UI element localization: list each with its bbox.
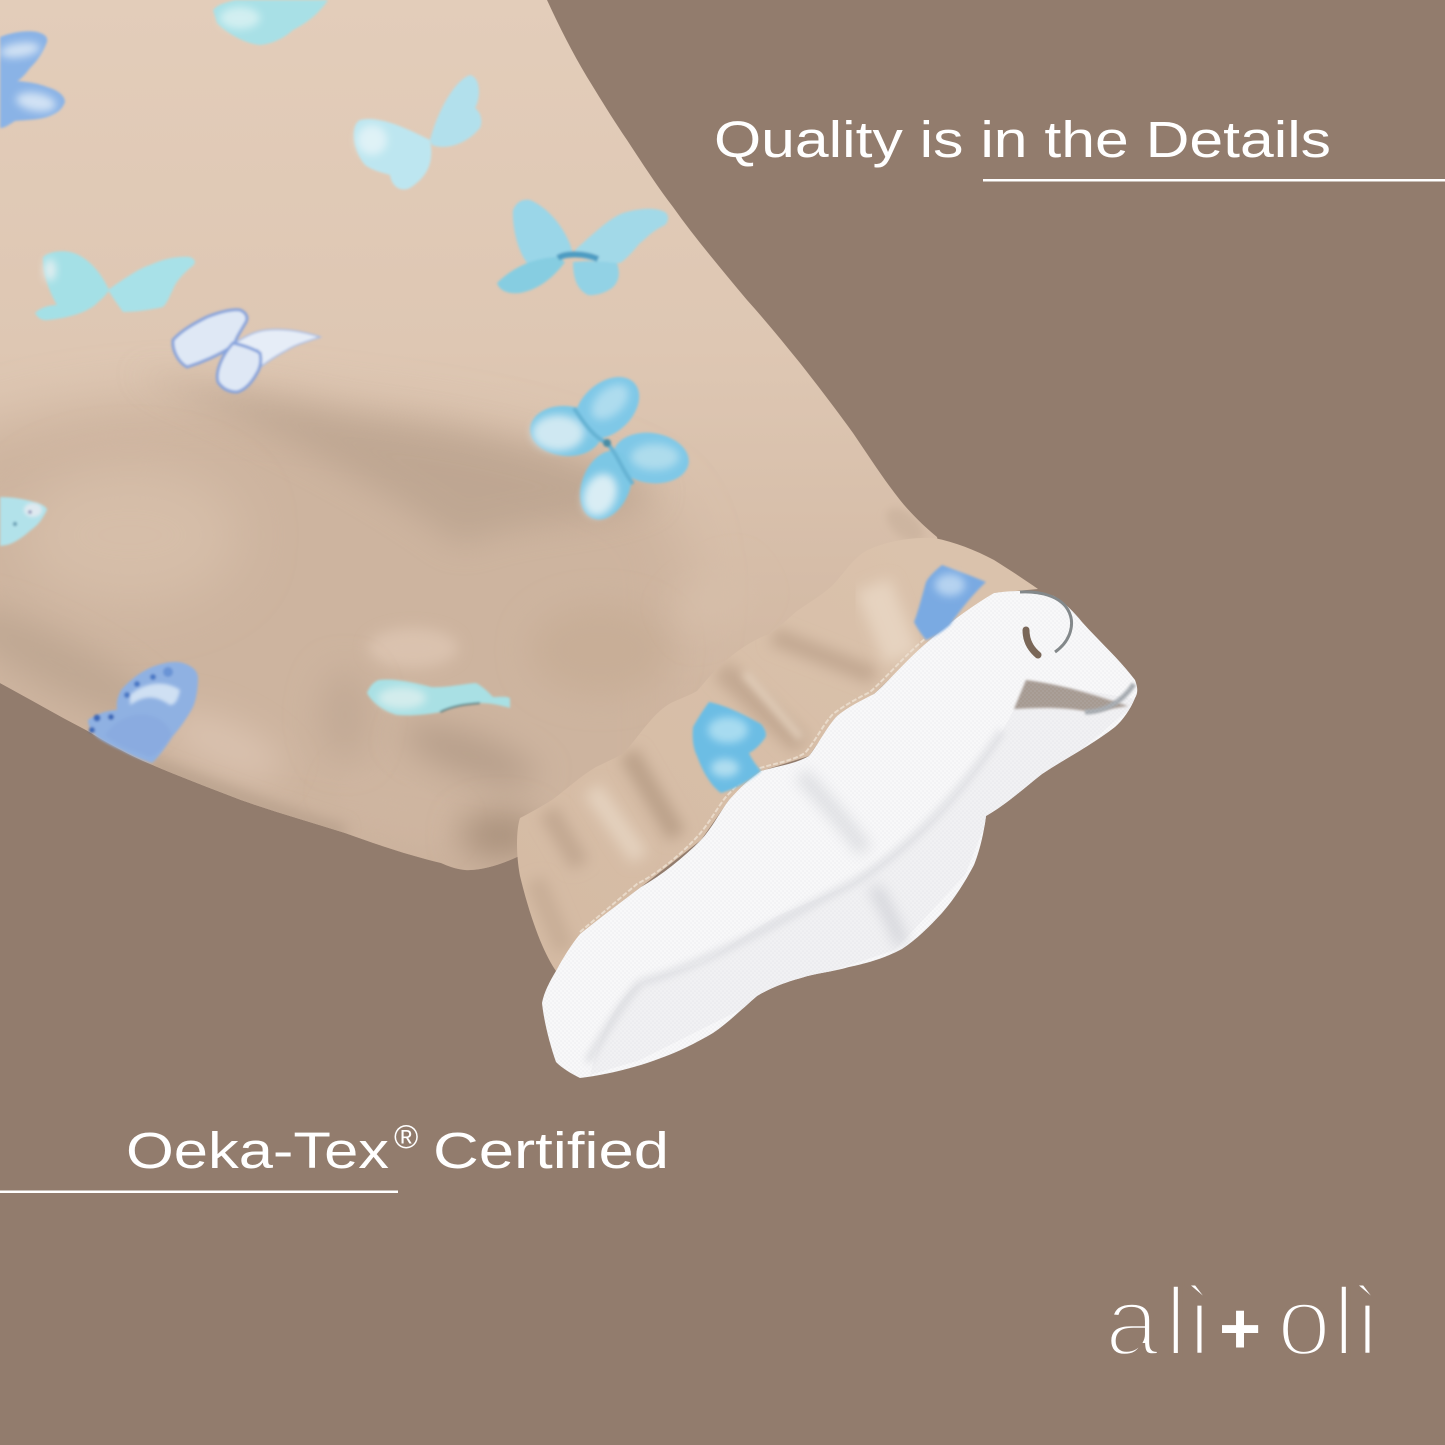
photo: sleeve body: [0, 0, 960, 900]
butterfly: top teal: [213, 0, 328, 45]
heading: certification: [126, 1118, 669, 1179]
logo: ali + oli: alì: [1105, 1267, 1213, 1376]
butterfly: flat aqua lower: [367, 680, 510, 715]
logo: ali + oli: [1105, 1267, 1381, 1376]
butterfly: top-left blue: [0, 31, 65, 128]
heading: certification: Certified: [433, 1122, 669, 1179]
butterfly: cuff left: [693, 702, 766, 793]
underline: certification: [0, 1190, 398, 1193]
logo: ali + oli: olì: [1277, 1267, 1381, 1376]
heading: certification: ®: [394, 1118, 418, 1155]
heading: quality: Quality is in the Details: [714, 111, 1331, 168]
butterfly: large blue centre: [528, 365, 692, 527]
butterfly: pale aqua upper: [354, 75, 481, 189]
photo: metal eyelet: [1020, 592, 1072, 655]
butterfly: deep blue lower: [88, 662, 198, 763]
butterfly: aqua left: [35, 251, 195, 320]
butterfly: aqua right: [497, 200, 668, 295]
underline: quality: [983, 179, 1445, 182]
butterfly: left edge: [0, 497, 47, 546]
butterfly: cuff right: [914, 565, 986, 640]
heading: certification: Oeka-Tex: [126, 1122, 389, 1179]
butterfly: periwinkle white: [173, 310, 320, 392]
photo: white inner lining: [530, 580, 1150, 1090]
butterfly prints: [0, 0, 986, 793]
logo: ali + oli: +: [1219, 1289, 1261, 1369]
photo: elasticated cuff band: [517, 538, 1038, 971]
